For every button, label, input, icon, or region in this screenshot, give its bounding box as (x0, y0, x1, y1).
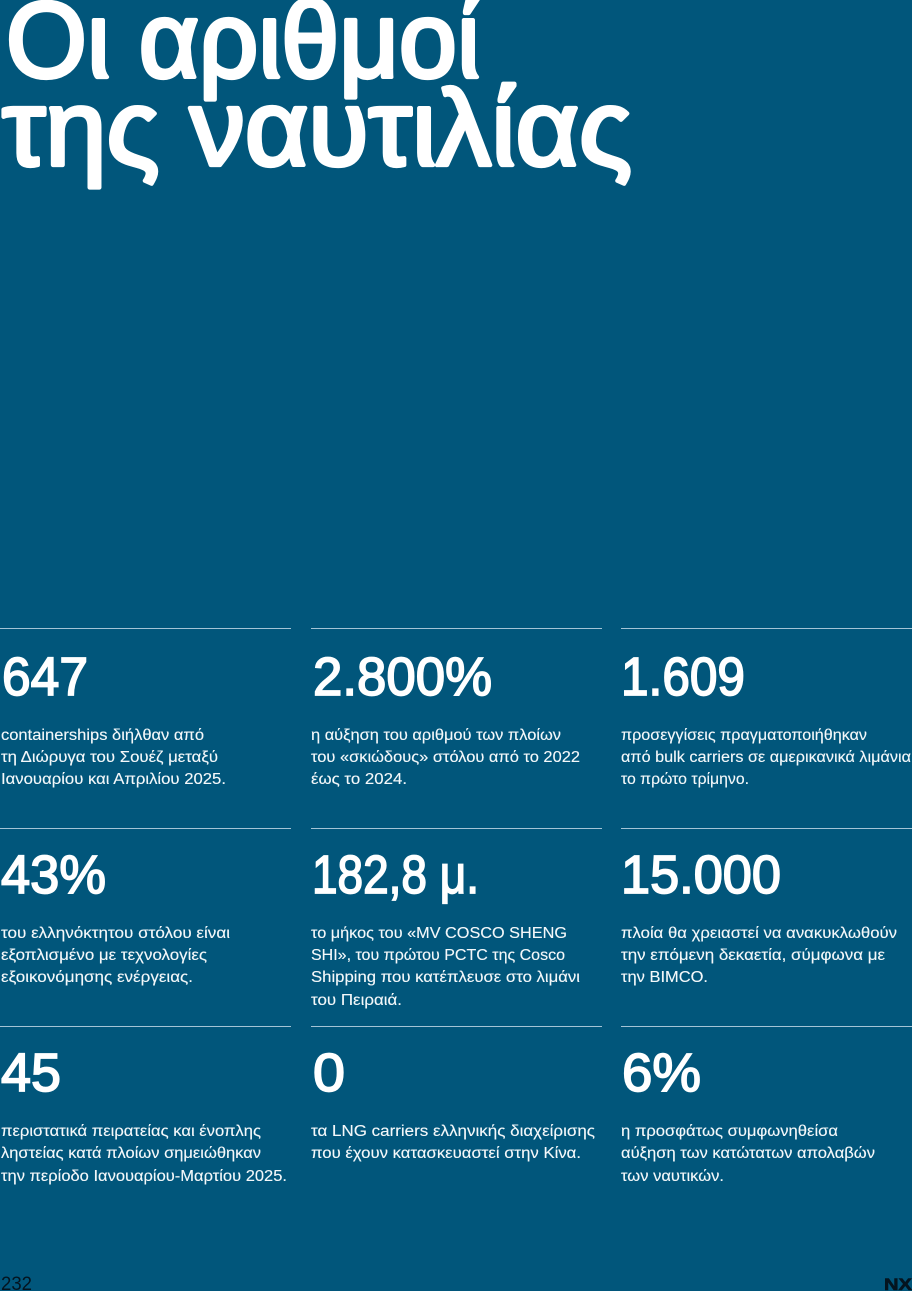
title: της ναυτιλίας (2, 67, 632, 188)
text: 2.800% description: η αύξηση του αριθμού των πλοίων (311, 727, 561, 744)
number: 43%: 43% (1, 845, 106, 905)
text: 15.000 description (621, 925, 897, 986)
text: 15.000 description: την επόμενη δεκαετία, σύμφωνα με (621, 947, 885, 964)
text: 2.800% description: έως το 2024. (311, 771, 407, 788)
text: 647 description: containerships διήλθαν από (1, 727, 204, 744)
text: 2.800% description: του «σκιώδους» στόλου από το 2022 (311, 749, 580, 766)
number: 2.800%: 2.800% (313, 647, 492, 707)
text: 45 description: την περίοδο Ιανουαρίου-Μαρτίου 2025. (1, 1168, 287, 1185)
text: 182,8 m. description: το μήκος του «MV COSCO SHENG (311, 925, 567, 942)
text: 2.800% description (311, 727, 580, 788)
number: 6%: 6% (622, 1043, 701, 1103)
text: 0 description: τα LNG carriers ελληνικής διαχείρισης (311, 1123, 595, 1140)
panel: 0 LNG carriers (311, 1026, 602, 1162)
text: 647 description: Ιανουαρίου και Απριλίου 2025. (1, 771, 226, 788)
panel: 15.000 ships to recycle (621, 828, 912, 986)
text: 1.609 description: το πρώτο τρίμηνο. (621, 771, 749, 788)
text: 182,8 m. description: του Πειραιά. (311, 992, 402, 1009)
panel: 45 piracy incidents (0, 1026, 291, 1185)
text: 182,8 m. description: SHI», του πρώτου PCTC της Cosco (311, 947, 565, 964)
text: 1.609 description: προσεγγίσεις πραγματοποιήθηκαν (621, 727, 867, 744)
text: 45 description (1, 1123, 287, 1185)
text: 43% description: εξοικονόμησης ενέργειας. (1, 969, 193, 986)
panel: 43% Greek-owned fleet (0, 828, 291, 986)
title (2, 0, 632, 188)
panel: 2.800% shadow fleet (311, 628, 602, 788)
number: 0: 0 (313, 1043, 345, 1103)
text: 0 description (311, 1123, 595, 1162)
text: 45 description: περιστατικά πειρατείας και ένοπλης (1, 1123, 261, 1140)
text: 0 description: που έχουν κατασκευαστεί στην Κίνα. (311, 1145, 581, 1162)
text: 1.609 description (621, 727, 911, 788)
text: 45 description: ληστείας κατά πλοίων σημειώθηκαν (1, 1145, 261, 1162)
number: 1.609: 1.609 (621, 647, 745, 707)
text: 6% description (621, 1123, 875, 1185)
number: 45: 45 (1, 1043, 61, 1103)
number: 182,8 μ.: 182,8 μ. (312, 845, 479, 905)
panel: 182,8 m. vessel length (311, 828, 602, 1009)
text: 15.000 description: πλοία θα χρειαστεί να ανακυκλωθούν (621, 925, 897, 942)
number: 647: 647 (2, 647, 88, 707)
text: 43% description: εξοπλισμένο με τεχνολογίες (1, 947, 207, 964)
text: 182,8 m. description (311, 925, 580, 1009)
text: 647 description: τη Διώρυγα του Σουέζ μεταξύ (1, 749, 218, 766)
number: 15.000: 15.000 (621, 845, 781, 905)
panel: 1.609 port calls (621, 628, 912, 788)
panel: 6% wage increase (621, 1026, 912, 1185)
text: 1.609 description: από bulk carriers σε αμερικανικά λιμάνια (621, 749, 911, 766)
text: 43% description (1, 925, 230, 986)
text: 6% description: των ναυτικών. (621, 1168, 724, 1185)
panel: 647 containerships (0, 628, 291, 788)
text: 43% description: του ελληνόκτητου στόλου είναι (1, 925, 230, 942)
text: 15.000 description: την BIMCO. (621, 969, 708, 986)
text: 647 description (1, 727, 226, 788)
text: 6% description: η προσφάτως συμφωνηθείσα (621, 1123, 838, 1140)
text: 6% description: αύξηση των κατώτατων απολαβών (621, 1145, 875, 1162)
text: 182,8 m. description: Shipping που κατέπλευσε στο λιμάνι (311, 969, 580, 986)
